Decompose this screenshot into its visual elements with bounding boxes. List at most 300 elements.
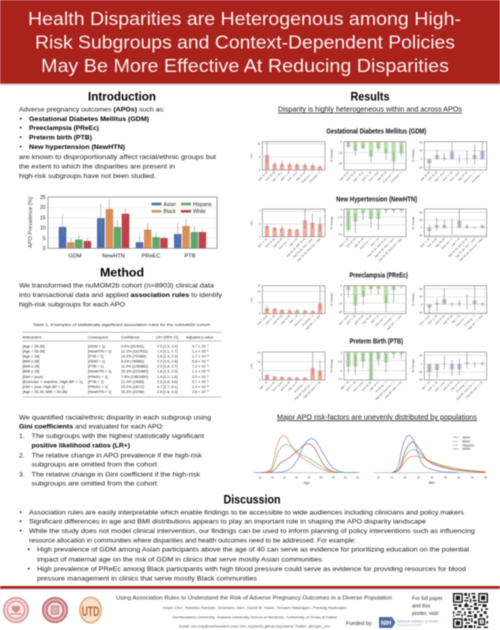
logo: NIH: Turning Discovery Into Health [397,624,422,627]
chart: GDM prevalence change: Age 30-34 [376,170,388,182]
chart: age density curves: 25 [295,475,299,479]
text block: adverse pregnancy outcomes: are known to disproportionally affect racial/ethnic groups but [19,154,216,161]
chart: NewHTN prevalence change: -5 [340,223,343,227]
table: association rules: Confidence [121,335,140,339]
bar chart: APO prevalence by race: 0 [43,246,46,252]
full paper note: poster, visit: [412,611,439,617]
chart: NewHTN gini change: 20 [419,218,423,222]
chart: PReEc gini change: 40 [419,287,423,291]
chart: PTB LR+: Age < 18 [258,380,269,391]
table: association rules: [GDM = 1] [88,344,105,348]
text block: discussion bullets: High prevalence of GDM among Asian participants above the age of 40 can serve as evidence for prioritizing education on the potential [37,547,470,554]
table: association rules: 7.2 × 10⁻⁸ [192,365,209,369]
table: association rules: [Diet = poor, High BP = 1] [22,385,64,389]
table: association rules [22,323,221,397]
chart: PReEc prevalence change: 0 [341,284,343,288]
chart: PTB gini change: Age < 18 [420,380,431,391]
chart: PTB gini change: Smoking = 1 [455,380,469,394]
text block: gini coefficients: The subgroups with the highest statistically significant [32,433,204,440]
chart: NewHTN prevalence change: -7.5 [337,233,343,237]
chart: age density curves: 15 [271,475,274,479]
bar chart: APO prevalence by race: APO Prevalence [%] [28,197,34,248]
chart: BMI density curves: 25 [417,475,420,479]
subheading: risk factors by population: Major APO risk-factors are unevenly distributed by populations [277,412,477,421]
table: association rules: 14.2% (70/489) [121,355,146,359]
chart: PReEc gini change: Diet = poor [419,314,431,326]
full paper note: and this [412,604,431,610]
chart: NewHTN prevalence change: Age 35-39, Diet = poor [373,237,395,259]
chart: GDM LR+: 5 [259,155,261,159]
density legend: Black [462,439,470,443]
text block: discussion bullets: resource allocation in communities where disparities and health outcomes need to be addressed. For example: [29,537,356,544]
chart: PTB gini change: Diet = poor [434,380,446,392]
chart: NewHTN gini change: BMI 30-35 [427,237,438,248]
chart: PTB LR+: 15 [257,350,261,354]
chart: BMI density curves: 10 [377,475,380,479]
text block: discussion bullets: Significant differences in age and BMI distributions appears to play an important role in shaping the APO disparity landscape [29,519,426,526]
table: association rules: [NewHTN = 1] [88,390,111,394]
text block: method description: into transactional data and applied association rules to identify [19,292,223,299]
chart: NewHTN LR+: BMI >= 35 [257,237,269,248]
chart: PReEc prevalence change: Age 35-39 [361,314,373,325]
chart: NewHTN prevalence change: BMI 30-35 [345,237,357,248]
chart title: NewHTN: New Hypertension (NewHTN) [336,197,417,204]
chart: PReEc prevalence change: Smoking = 1 [382,314,395,327]
chart: PReEc prevalence change: -10 [338,301,343,305]
chart: PTB gini change: -25 [418,370,423,374]
chart: NewHTN gini change: 0 [421,226,423,230]
chart: PTB LR+: Age 18-24 [287,380,299,392]
chart: GDM prevalence change: Age 35-39 [338,170,350,182]
chart: NewHTN LR+: Age 35-39, Exercise = high [296,237,322,262]
chart: PTB gini change: 25 [419,353,423,357]
table: association rules: 9.6% (51/531) [121,344,144,348]
bar chart: APO prevalence by race: NewHTN [102,254,125,260]
text block: method description [19,283,223,309]
chart: PTB LR+: 5 [259,369,261,373]
chart: PTB prevalence change: Age 18-24 [368,380,380,392]
chart legend: Black [164,209,176,215]
table: association rules: [Exercise = inactive, High BP = 1] [22,380,82,384]
text block: adverse pregnancy outcomes [19,106,216,180]
text block: adverse pregnancy outcomes: • [20,116,22,123]
chart: NewHTN gini change: Age 35-39, Diet = poor [454,237,476,259]
chart: PReEc gini change: -20 [418,310,423,314]
logo: Northwestern University seal [4,598,28,622]
panel: introduction [19,90,216,180]
chart: GDM gini change: 0 [421,157,423,161]
table: association rules: 5.8 × 10⁻⁶ [192,360,209,364]
table: association rules: 7.9% (146/1850) [121,375,148,379]
chart: GDM gini change: 20 [419,149,423,153]
table: association rules: 3.6 × 10⁻² [192,390,209,394]
chart: age density curves: 50 [356,475,360,479]
chart: PTB prevalence change: Smoking = 1 [374,380,388,394]
chart: PTB prevalence change: BMI >= 35 [345,380,357,392]
QR code [453,593,488,628]
bar chart: APO prevalence by race: PTB [185,254,196,260]
text block: adverse pregnancy outcomes: Gestational Diabetes Mellitus (GDM) [29,116,149,123]
text block: discussion bullets: While the study does not model clinical intervention, our findings can be used to inform planning of policy interventions such as influencing [29,528,475,535]
table: association rules: LR+ [95% CI] [156,335,178,339]
chart: GDM LR+: Age > 40 yr [271,170,283,183]
chart: PTB prevalence change: -5 [340,369,343,373]
text block: gini coefficients: Gini coefficients and evaluated for each APO: [19,424,164,431]
chart: NewHTN LR+: Exercise = 1 [278,237,291,250]
chart: PTB gini change: BMI 30-35 [442,380,454,392]
chart: GDM prevalence change: Age > 40 yr [352,170,364,183]
chart: GDM gini change [411,141,487,184]
density legend: Hispanic [462,443,475,447]
chart: PTB LR+: Diet = poor [271,380,283,392]
table: association rules: 2.2 [1.6, 2.8] [157,360,178,364]
density legend: White [462,447,471,451]
chart: PReEc prevalence change: Exercise = 1 [374,314,388,327]
chart: PTB prevalence change: Diet = poor [352,380,364,392]
bar chart: APO prevalence by race: PReEC [142,254,160,260]
chart: NewHTN gini change: BMI >= 35 [419,237,431,248]
chart: NewHTN LR+: Age 35-39, BMI 30-35 [285,237,307,258]
chart: NewHTN prevalence change: -2.5 [337,215,343,219]
table: association rules: [PTB = 1] [88,365,103,369]
title banner: Risk Subgroups and Context-Dependent Policies [35,32,455,52]
table: association rules: [GDM = 1] [88,360,105,364]
table: association rules: 1.7 × 10⁻³ [192,355,209,359]
chart: NewHTN prevalence change: % change [330,216,334,230]
table: association rules: 1.1 × 10⁻² [192,350,209,354]
chart: GDM prevalence change: Exercise = 1 [382,170,395,183]
chart: age density curves: 45 [344,475,347,479]
chart: GDM prevalence change: BMI >= 35 [361,170,373,182]
chart: NewHTN prevalence change: 0 [341,207,343,211]
heading: method: Method [100,266,144,280]
chart: BMI density curves: 20 [404,475,407,479]
chart: PTB prevalence change: High BP, BMI >= 35 [384,380,403,399]
chart: PTB prevalence change [330,351,406,401]
bar chart: APO prevalence by race: 5 [43,236,46,242]
chart: PReEc prevalence change: Age < 18 [369,314,380,324]
panel: discussion [20,492,475,582]
table: association rules: [Age < 18] [22,355,39,359]
text block: gini coefficients: We quantified racial/ethnic disparity in each subgroup using [19,414,211,421]
chart: GDM LR+: Age 30-34 [295,170,307,182]
chart: age density curves: Age [304,481,310,485]
chart: GDM prevalence change: Smoking = 1 [389,170,403,184]
logo: NIH: National Institutes of Health [397,620,438,624]
chart: PReEc prevalence change: % change [330,293,334,306]
heading: discussion: Discussion [224,492,280,506]
table: association rules: 1.1 × 10⁻¹⁰ [192,370,211,374]
funded by: Funded by: [346,621,373,627]
table: association rules: [Age = 35-39] [22,344,45,348]
chart: GDM gini change: Exercise = 1 [463,170,476,183]
chart: PReEc LR+: 5 [259,300,261,304]
chart: PTB prevalence change: % change [330,359,334,373]
chart: NewHTN LR+: Age 35-39 [272,237,284,248]
chart: NewHTN LR+ [249,209,325,262]
chart: PReEc LR+: BMI 30-35 [272,314,284,325]
chart: PReEc prevalence change: Diet = poor [338,314,350,326]
chart: PTB prevalence change: Age < 18 [339,380,350,391]
chart: NewHTN gini change: Age 35-39, BMI 30-35 [447,237,469,258]
heading: introduction: Introduction [88,90,156,104]
chart: NewHTN gini change: Age > 40 [450,237,461,247]
text block: method description: We transformed the nuMOM2b cohort (n=8903) clinical data [19,283,214,290]
chart: PReEc LR+ [249,284,325,331]
chart: PTB gini change: High BP, BMI >= 35 [465,380,484,399]
text block: adverse pregnancy outcomes: Preeclampsia (PReEc) [29,125,99,132]
chart: PReEc gini change: BMI >= 35 [427,314,439,325]
table: association rules: Antecedent [22,335,41,339]
chart: PTB prevalence change: -2.5 [337,360,343,364]
chart: NewHTN gini change: Age 35-39 [434,237,446,248]
text block: gini coefficients: 1. [19,433,25,440]
chart: PReEc gini change: BMI 30-35 [434,314,446,325]
chart: GDM gini change: BMI 35-39 [427,170,439,182]
chart: BMI density curves: 30 [431,475,434,479]
logo: UTD seal [80,597,101,623]
chart: PTB LR+: BMI 30-35 [280,380,291,392]
title banner [0,0,500,85]
chart title: preterm birth: Preterm Birth (PTB) [350,339,403,346]
logo: Indiana University seal [43,598,67,622]
text block: discussion bullets: pressure management in clinics that serve mostly Black communities [37,575,258,582]
table: association rules: 25.3% (223/882) [121,370,148,374]
chart: NewHTN LR+: 2 [259,222,261,226]
chart: PReEc prevalence change: -5 [340,293,343,297]
text block: discussion bullets: • [28,566,30,573]
chart: GDM gini change: Age > 40 yr [433,170,446,183]
chart: PReEc gini change [411,286,487,331]
chart: age density curves: 40 [332,475,335,479]
bar chart: APO prevalence by race: GDM [68,254,82,260]
chart title: GDM: Gestational Diabetes Mellitus (GDM) [326,128,426,135]
table: association rules: 1.2 × 10⁻³ [192,385,209,389]
footer affiliations: ¹Northeastern University, ²Indiana University School of Medicine, ³University of Texas at Dallas [172,615,337,619]
title banner: May Be More Effective At Reducing Disparities [41,56,449,76]
chart: PReEc LR+: 10 [257,289,261,293]
chart: GDM gini change: Age 35-39 [419,170,431,182]
text block: adverse pregnancy outcomes: high-risk subgroups have not been studied. [19,173,156,180]
text block: adverse pregnancy outcomes: • [20,134,22,142]
chart: PReEc LR+: 15 [257,284,261,288]
chart: PReEc gini change: 0 [421,302,423,306]
table: association rules: 2.2 [1.8, 2.7] [157,365,178,369]
chart: PReEc prevalence change [330,284,406,331]
text block: discussion bullets: • [20,509,22,516]
table: association rules: 21.4% (19/89) [121,380,144,384]
table: association rules: 2.6 [1.6, 4.3] [157,390,178,394]
table: association rules: 1.4 [1.1, 1.7] [157,350,178,354]
chart: PTB gini change: 0 [421,362,423,366]
table: association rules: 21.1% (112/531) [121,350,148,354]
chart title: preeclampsia: Preeclampsia (PReEc) [349,272,408,279]
chart: BMI density curves: 40 [457,475,461,479]
full paper note [412,596,443,617]
table: association rules: [BMI ≥ 35] [22,370,39,374]
text block: method description: high-risk subgroups for each APO [19,302,125,309]
table: association rules: Consequent [88,335,108,339]
chart: GDM LR+: Diet = poor [286,170,298,182]
logo: NIH [379,617,438,628]
chart: PReEc gini change: 20 [419,295,423,299]
bar chart: APO prevalence by race: 20 [40,205,46,211]
chart: PReEc gini change: High BP = 1, Diet [466,314,484,331]
bar chart: APO prevalence by race: 10 [40,226,46,232]
chart: GDM prevalence change: BMI 35-39 [345,170,357,182]
table: association rules: 22.2% (16/72) [121,385,144,389]
table: association rules: [Age = 35-39] [22,350,45,354]
chart: GDM prevalence change: % change [330,149,334,162]
chart: BMI density curves: 50 [484,475,488,479]
chart: GDM LR+: 0 [259,168,261,172]
chart: NewHTN gini change: Exercise = 1 [440,237,454,250]
table: association rules: 4.7 [2.7, 8.1] [157,385,178,389]
chart: BMI density curves: 15 [390,475,394,479]
chart: GDM prevalence change: Diet = poor [368,170,380,182]
chart: NewHTN LR+: LR+ [249,220,253,226]
chart: PTB gini change: High BP, Exercise = 1 [455,380,476,401]
chart: NewHTN prevalence change: Age > 40 [369,237,380,247]
chart: NewHTN prevalence change: BMI >= 35 [338,237,350,248]
table: association rules: 8.4% (78/882) [121,360,144,364]
table: association rules: [PTB = 1] [88,380,103,384]
text block: discussion bullets: High prevalence of PReEc among Black participants with high blood pressure could serve as evidence for providing resources for blood [37,566,466,573]
chart: PTB LR+: 0 [259,378,261,382]
chart: PTB gini change: % change [411,359,415,373]
chart legend: Hispanic [193,202,213,208]
chart: GDM gini change: 40 [419,141,423,145]
chart: age density curves [253,435,360,485]
text block: discussion bullets: impact of maternal age on the risk of GDM in clinics that serve mostly Asian communities [37,557,323,564]
title banner: Health Disparities are Heterogenous among High- [28,9,461,29]
chart: PReEc prevalence change: BMI 30-35 [353,314,365,325]
text block: adverse pregnancy outcomes: New hypertension (NewHTN) [29,144,125,151]
footer paper title: Using Association Rules to Understand the Risk of Adverse Pregnancy Outcomes in a Diverse Population [116,595,392,601]
chart: PReEc gini change: % change [411,293,415,306]
panel: preeclampsia charts [249,272,487,331]
chart: NewHTN gini change: % change [411,216,415,230]
chart: GDM LR+: BMI >= 35 [280,170,291,182]
chart: PTB gini change: BMI >= 35 [427,380,439,392]
table: association rules: [PTB = 1] [88,355,103,359]
chart: PReEc gini change: Smoking = 1 [463,314,476,327]
text block: adverse pregnancy outcomes: • [20,125,22,132]
chart: PReEc LR+: Age < 18 [288,314,299,324]
chart: NewHTN gini change: Age 35-39, Exercise = high [458,237,484,262]
text block: gini coefficients: 2. [19,452,25,459]
chart: GDM LR+ [249,142,325,184]
chart: PReEc gini change: Exercise = 1 [455,314,469,327]
chart: GDM gini change: % change [411,149,415,162]
chart: NewHTN gini change [411,209,487,262]
chart: PReEc LR+: Exercise = 1 [293,314,307,327]
chart: NewHTN prevalence change: Age 35-39, Exercise = high [377,237,403,262]
chart: GDM prevalence change: -10 [338,151,343,155]
chart: NewHTN gini change: 40 [419,210,423,214]
chart: PTB prevalence change: High BP, Exercise = 1 [374,380,395,401]
chart: GDM prevalence change: 0 [341,140,343,144]
subheading: disparity heterogeneous: Disparity is highly heterogeneous within and across APOs [278,105,462,114]
chart: GDM gini change: -20 [418,165,423,169]
full paper note: For full paper [412,596,443,602]
chart: NewHTN LR+: Age 35-39, Diet = poor [292,237,314,259]
panel: method [19,266,223,488]
text block: discussion bullets: • [20,519,22,526]
chart: PReEc LR+: Diet = poor [256,314,268,326]
table: association rules: 1.8 [1.4, 2.3] [157,355,178,359]
chart: PTB prevalence change: BMI 30-35 [361,380,373,392]
table: association rules: 1.8 [1.5, 2.0] [157,370,178,374]
table: association rules: 2.9 [1.8, 4.6] [157,380,178,384]
text block: adverse pregnancy outcomes: Preterm birth (PTB) [29,134,92,142]
bar chart: APO prevalence by race [28,195,217,260]
chart: PTB prevalence change: 0 [341,351,343,355]
chart: PTB LR+: Smoking = 1 [293,380,307,394]
chart: PTB LR+ [249,350,325,401]
chart legend: Asian [164,202,176,208]
chart: PReEc gini change: Age 35-39 [442,314,454,325]
chart: PReEc prevalence change: High BP = 1, Diet [385,314,403,331]
text block: discussion bullets: Association rules are easily interpretable which enable findings to be accessible to wide audiences including clinicians and policy makers [29,509,465,516]
chart: PTB LR+: LR+ [249,363,253,369]
table: association rules: Adjusted p-value [186,335,213,339]
chart: GDM prevalence change [330,140,406,184]
text block: gini coefficients: subgroups are omitted from the cohort [32,462,157,469]
table: association rules: 3.0 × 10⁻³ [192,375,209,379]
bar chart: APO prevalence by race: 25 [40,195,46,201]
table: association rules: 5.7 × 10⁻³ [192,380,209,384]
table: association rules: 2.5 [1.9, 3.2] [157,344,178,348]
chart: GDM gini change: BMI >= 35 [442,170,454,182]
chart: GDM LR+: Exercise = 1 [301,170,314,183]
table: association rules: [BMI ≥ 35] [22,365,39,369]
chart: PTB LR+: High BP, BMI >= 35 [302,380,322,399]
panel: preterm birth charts [249,339,487,401]
chart: PTB LR+: BMI >= 35 [265,380,276,392]
text block: gini coefficients: The relative change in APO prevalence if the high-risk [32,452,203,459]
chart legend [152,202,213,215]
chart: GDM LR+: Smoking = 1 [308,170,322,184]
chart: NewHTN gini change: -20 [418,233,423,237]
density legend [453,435,475,451]
chart: NewHTN LR+: Age > 40 [288,237,299,247]
table: association rules: 4.7 × 10⁻⁷ [192,344,209,348]
chart: GDM LR+: 10 [257,142,261,146]
panel: gestational diabetes charts [249,128,487,184]
table: association rules: [NewHTN = 1] [88,350,111,354]
table: association rules: [NewHTN = 1] [88,370,111,374]
table: association rules: 33.3% (22/66) [121,390,144,394]
table: association rules: [Age = 35-39, BMI = 30-35] [22,390,67,394]
text block: adverse pregnancy outcomes: • [20,144,22,151]
table: association rules: 11.9% (105/882) [121,365,148,369]
chart: age density curves: 20 [283,475,286,479]
footer contact: Email: chu.hoy@northeastern.edu/ GH: hoyinchu.github.io/posters/ Twitter: @hoyin_chu [179,624,330,628]
chart: age density curves: 30 [308,475,311,479]
text block: discussion bullets [20,509,475,582]
chart: GDM gini change: Smoking = 1 [470,170,484,184]
chart: PTB gini change [411,352,487,401]
chart: BMI density curves [373,435,488,485]
table: association rules: Table 1. Examples of statistically significant association rules for the nuMoM2b cohort. [33,323,211,327]
chart: GDM gini change: Age 30-34 [457,170,469,182]
text block: gini coefficients: subgroups are omitted from the cohort [32,480,157,488]
chart: PTB LR+: 10 [257,360,261,364]
chart: PReEc LR+: BMI >= 35 [265,314,276,325]
chart: PReEc LR+: 0 [259,312,261,316]
text block: gini coefficients [19,414,211,488]
